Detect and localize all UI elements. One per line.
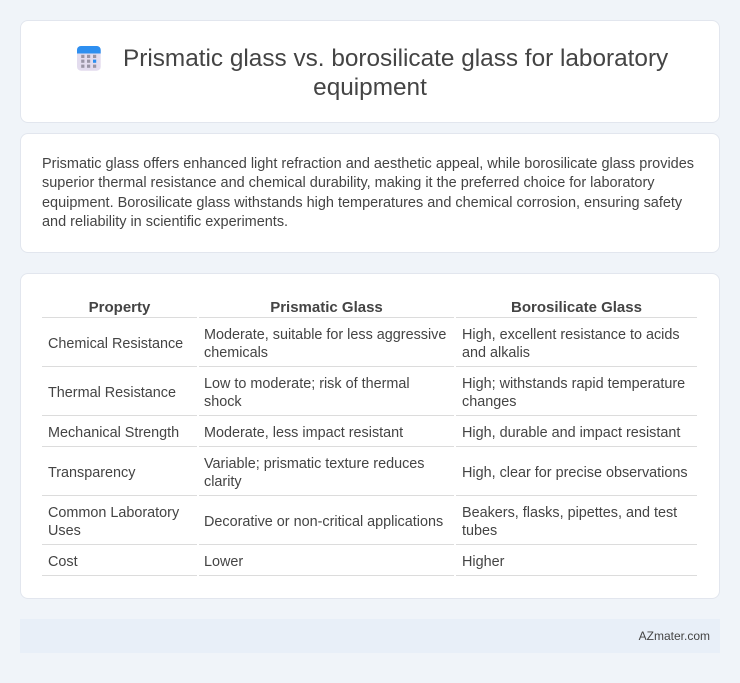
summary text: and reliability in scientific experiments.: [42, 214, 288, 230]
row: chemical resistance: and alkalis: [462, 345, 530, 361]
row: mechanical strength: Moderate, less impact resistant: [204, 425, 403, 441]
footer bar: [20, 619, 720, 653]
icon: calendar grid: [77, 46, 101, 71]
title card: [20, 20, 720, 123]
row: transparency: High, clear for precise observations: [462, 465, 688, 481]
row: common laboratory uses: tubes: [462, 523, 497, 539]
row: mechanical strength: [48, 425, 680, 441]
header row: [89, 299, 642, 316]
row: thermal resistance: Thermal Resistance: [48, 385, 176, 401]
table card: [20, 273, 720, 599]
row: common laboratory uses: Uses: [48, 523, 81, 539]
summary text: superior thermal resistance and chemical durability, making it the preferred choice for laboratory: [42, 175, 655, 191]
row: thermal resistance: shock: [204, 394, 242, 410]
heading: [123, 45, 668, 101]
comparison table: [42, 299, 697, 576]
row: thermal resistance: changes: [462, 394, 516, 410]
row: cost: Cost: [48, 554, 78, 570]
row: transparency: [48, 456, 688, 490]
row: cost: [48, 554, 504, 570]
heading: Prismatic glass vs. borosilicate glass for laboratory: [123, 45, 668, 72]
summary text: [42, 156, 694, 230]
row: transparency: Variable; prismatic texture reduces: [204, 456, 424, 472]
row: common laboratory uses: [48, 505, 678, 539]
row: cost: Higher: [462, 554, 504, 570]
row: thermal resistance: [48, 376, 685, 410]
row: common laboratory uses: Decorative or non-critical applications: [204, 514, 443, 530]
row: common laboratory uses: Common Laboratory: [48, 505, 179, 521]
footer credit: AZmater.com: [639, 629, 710, 643]
summary card: [20, 133, 720, 253]
row: cost: Lower: [204, 554, 243, 570]
header row: Borosilicate Glass: [511, 299, 642, 316]
summary text: equipment. Borosilicate glass withstands high temperatures and chemical corrosion, ensuring safety: [42, 195, 682, 211]
header row: Property: [89, 299, 150, 316]
row: chemical resistance: [48, 327, 680, 361]
row: common laboratory uses: Beakers, flasks, pipettes, and test: [462, 505, 677, 521]
row: mechanical strength: High, durable and impact resistant: [462, 425, 680, 441]
row: transparency: Transparency: [48, 465, 135, 481]
heading: equipment: [313, 74, 427, 101]
header row: Prismatic Glass: [270, 299, 383, 316]
row: chemical resistance: Chemical Resistance: [48, 336, 183, 352]
row: chemical resistance: Moderate, suitable for less aggressive: [204, 327, 446, 343]
summary text: Prismatic glass offers enhanced light refraction and aesthetic appeal, while borosilicate glass provides: [42, 156, 694, 172]
row: chemical resistance: High, excellent resistance to acids: [462, 327, 680, 343]
row: transparency: clarity: [204, 474, 242, 490]
row: chemical resistance: chemicals: [204, 345, 268, 361]
row: mechanical strength: Mechanical Strength: [48, 425, 179, 441]
row: thermal resistance: Low to moderate; risk of thermal: [204, 376, 410, 392]
row: thermal resistance: High; withstands rapid temperature: [462, 376, 685, 392]
